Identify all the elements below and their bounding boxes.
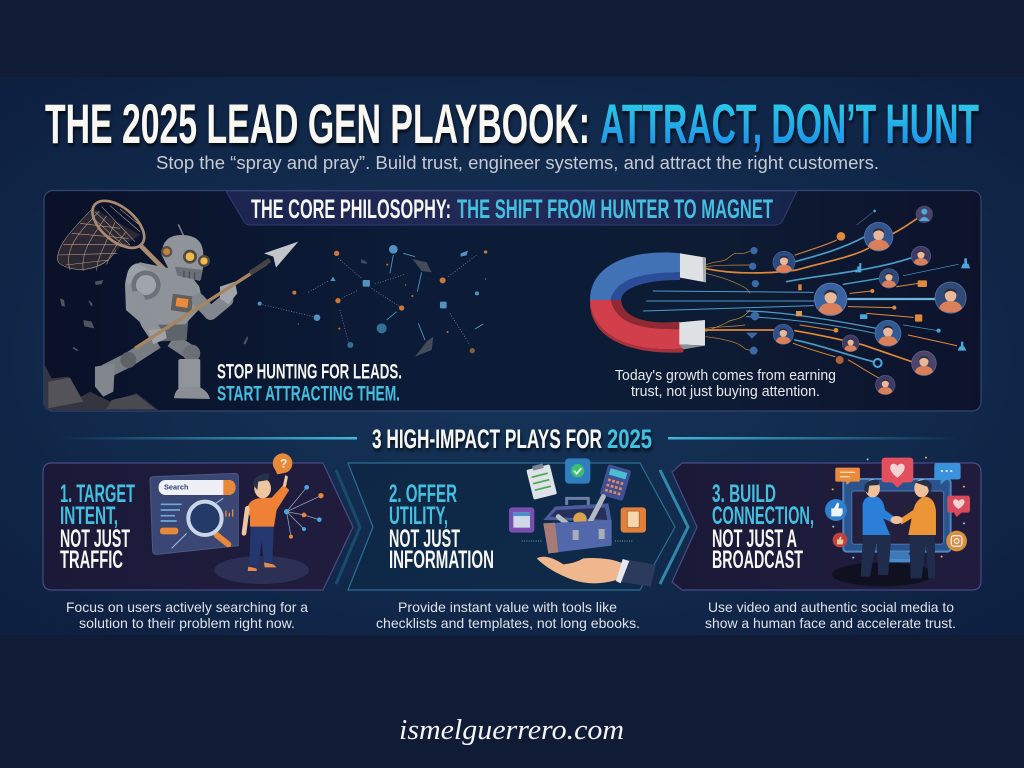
banner: core philosophy heading (226, 191, 797, 225)
card 1 caption: Focus on users actively searching for a (66, 599, 308, 615)
front leg (172, 340, 192, 353)
card 2 heading: 2. OFFER (389, 480, 457, 508)
card 1 heading: TRAFFIC (60, 546, 123, 574)
net (57, 208, 140, 270)
text: growth from trust: trust, not just buying attention. (631, 384, 820, 400)
text: growth from trust: Today's growth comes from earning (615, 368, 836, 384)
card 2 heading (389, 480, 494, 574)
card 1 heading: INTENT, (60, 502, 118, 530)
section heading: 3 high-impact plays: 3 HIGH-IMPACT PLAYS FOR (372, 424, 602, 454)
banner: core philosophy heading: THE SHIFT FROM HUNTER TO MAGNET (457, 194, 773, 224)
card 1 heading: 1. TARGET (60, 480, 135, 508)
panel: core philosophy (44, 190, 981, 411)
card 1 heading (60, 480, 135, 574)
icon: handshake, monitor and social media (825, 457, 970, 586)
title: THE 2025 LEAD GEN PLAYBOOK: (45, 92, 590, 155)
right arm (198, 300, 227, 313)
text: stop hunting: START ATTRACTING THEM. (217, 382, 400, 406)
card 2 heading: INFORMATION (389, 546, 494, 574)
card 3 caption (705, 599, 956, 631)
illustration: magnet attracting customers (590, 206, 970, 395)
customer avatars (773, 206, 967, 395)
card 2 caption: Provide instant value with tools like (398, 599, 617, 615)
card 3: build connection (672, 457, 981, 590)
illustration: robot hunter with net and spear (45, 192, 298, 410)
card 1 heading: NOT JUST (60, 525, 130, 553)
footer: website: ismelguerrero.com (399, 714, 624, 746)
icon: toolbox, tools and hand (509, 458, 656, 587)
small icons (746, 210, 970, 367)
head (162, 235, 203, 280)
card 2 heading: NOT JUST (389, 525, 460, 553)
banner: core philosophy heading: THE CORE PHILOSOPHY: (251, 194, 451, 224)
section heading: 3 high-impact plays (60, 424, 960, 454)
section heading: 3 high-impact plays: 2025 (607, 424, 652, 454)
subtitle: Stop the “spray and pray”. Build trust, engineer systems, and attract the right customers. (156, 153, 879, 173)
card 1 caption (66, 599, 308, 631)
left arm (137, 298, 155, 333)
icon: search screen and person: ? (280, 457, 287, 471)
card 3 heading (712, 480, 814, 574)
icon: search screen and person (150, 453, 324, 584)
torso (125, 262, 203, 325)
card 2 heading: UTILITY, (389, 502, 448, 530)
card 3 caption: show a human face and accelerate trust. (705, 615, 956, 631)
card 2 caption (376, 599, 640, 631)
rocks (45, 365, 158, 410)
card 3 heading: 3. BUILD (712, 480, 776, 508)
card 2 caption: checklists and templates, not long ebooks. (376, 615, 640, 631)
waist (152, 320, 188, 342)
card 1 caption: solution to their problem right now. (79, 615, 295, 631)
text: growth from trust (615, 368, 836, 400)
text: stop hunting (217, 360, 402, 406)
text: stop hunting: STOP HUNTING FOR LEADS. (217, 360, 402, 384)
spear (135, 263, 267, 348)
illustration: scattered network of leads (258, 245, 487, 357)
magnet body (590, 252, 682, 300)
card 3 heading: NOT JUST A (712, 525, 797, 553)
attraction lines (643, 218, 958, 378)
icon: search screen and person: Search (164, 483, 189, 492)
card 3 caption: Use video and authentic social media to (708, 599, 954, 615)
card 3 heading: CONNECTION, (712, 502, 814, 530)
back leg (105, 342, 157, 372)
card 1: target intent (43, 453, 360, 590)
card 3 heading: BROADCAST (712, 546, 803, 574)
card 2: offer utility (348, 458, 688, 590)
